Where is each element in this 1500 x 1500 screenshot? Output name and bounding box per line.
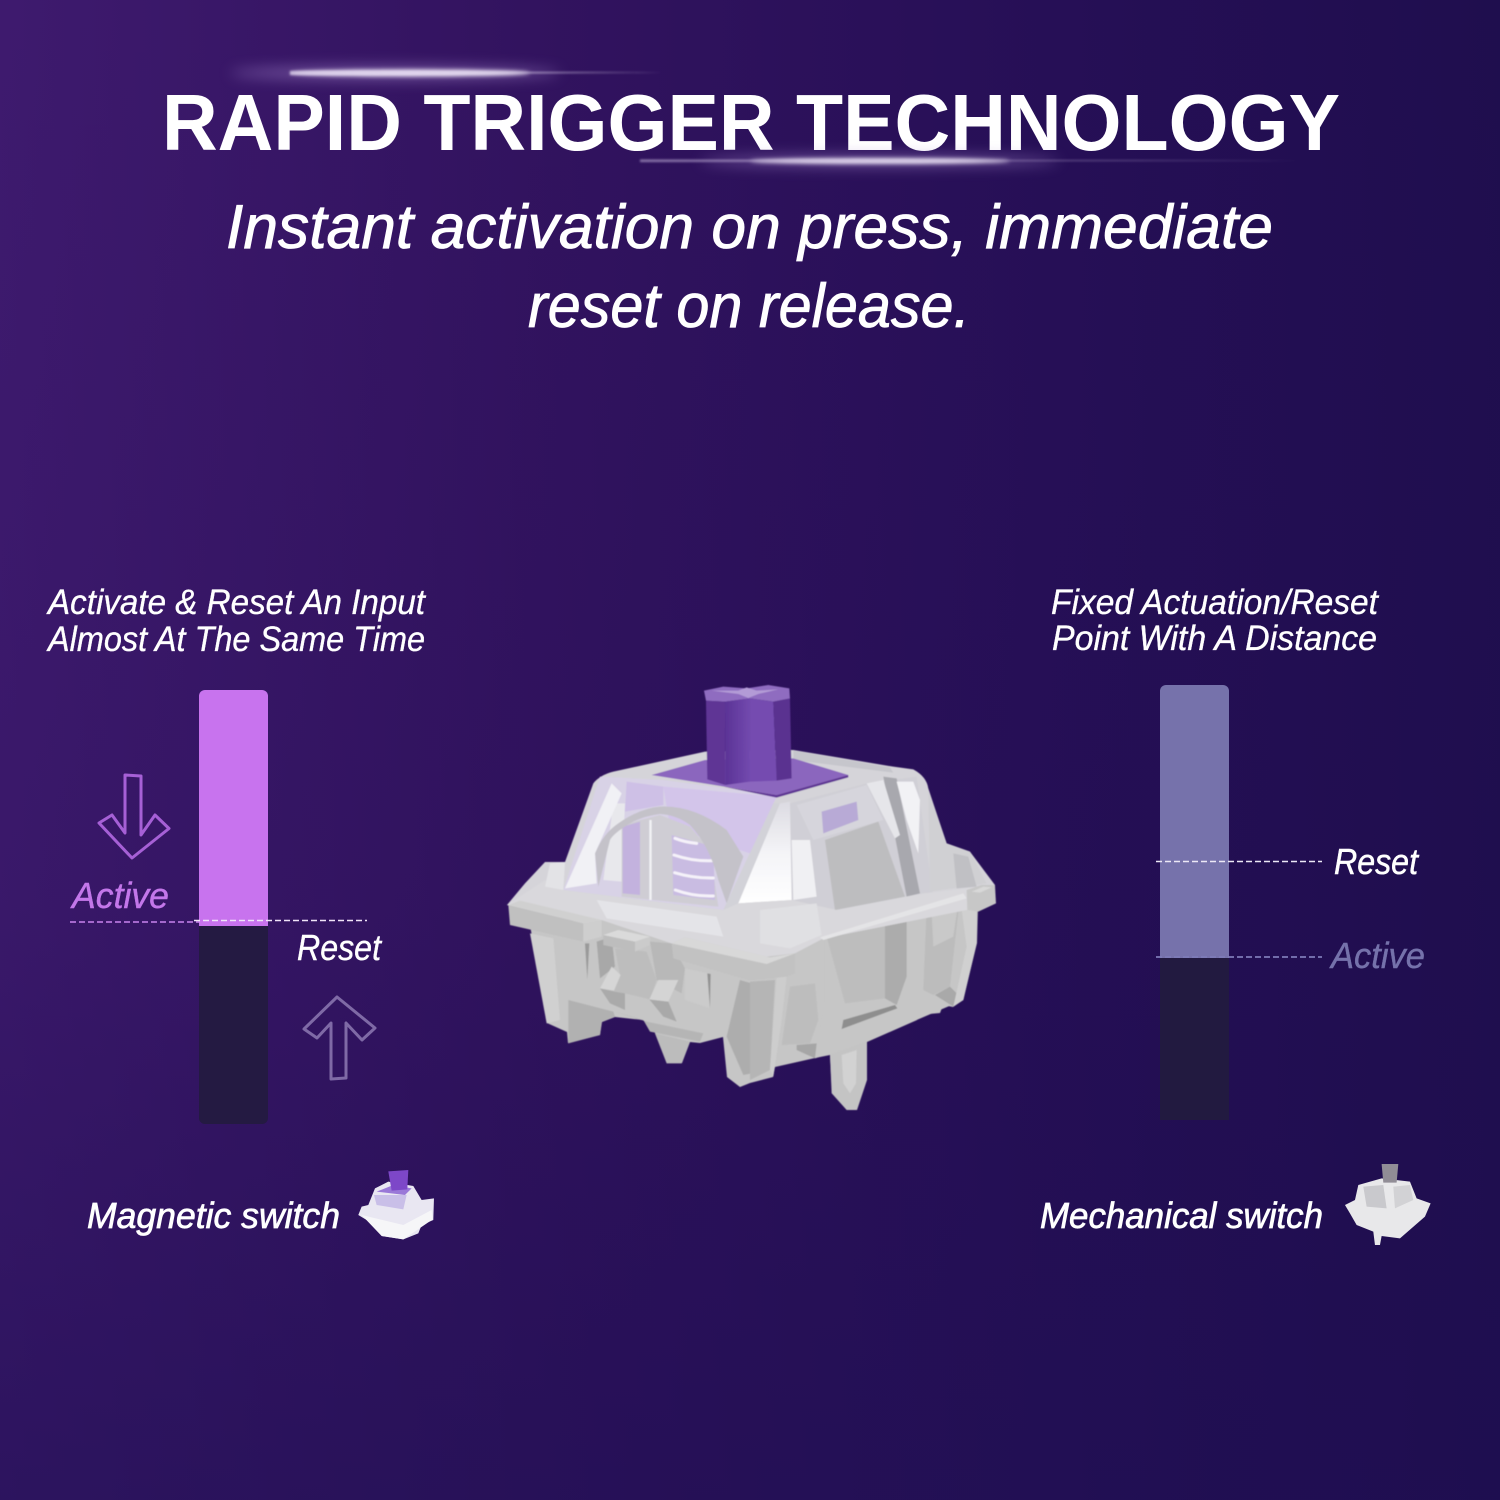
icon: small magnetic switch <box>358 1170 434 1239</box>
pins and lower housing <box>530 900 978 1110</box>
lower left facets <box>530 930 752 1075</box>
front window <box>563 777 777 910</box>
label: magnetic switch: Magnetic switch <box>87 1195 340 1236</box>
label: mechanical switch: Mechanical switch <box>1040 1195 1323 1236</box>
active line: magnetic <box>70 921 200 923</box>
heading: magnetic <box>46 583 426 659</box>
top edge detail <box>793 751 893 773</box>
purple plate <box>652 758 848 798</box>
heading: mechanical: Point With A Distance <box>1052 619 1377 658</box>
label: active: Active <box>1329 935 1425 976</box>
travel bar: mechanical <box>1160 685 1229 1120</box>
title: RAPID TRIGGER TECHNOLOGY <box>162 78 1340 167</box>
heading: mechanical <box>1051 583 1379 658</box>
reset line: mechanical <box>1156 860 1322 862</box>
heading: magnetic: Activate & Reset An Input <box>46 583 426 622</box>
interior below arch <box>622 815 718 907</box>
right nub <box>820 885 996 940</box>
label: reset: Reset <box>1334 841 1420 882</box>
icon: up arrow <box>304 997 375 1079</box>
icon: down arrow <box>99 775 169 858</box>
icon: small mechanical switch <box>1345 1164 1431 1245</box>
travel bar: magnetic <box>199 690 268 1124</box>
lower band <box>507 880 995 957</box>
subtitle <box>226 193 1273 341</box>
lower right facets <box>750 892 977 1110</box>
locating pin <box>830 1042 867 1110</box>
label: reset: Reset <box>297 927 383 968</box>
heading: mechanical: Fixed Actuation/Reset <box>1051 583 1379 622</box>
arch <box>595 807 743 903</box>
heading: magnetic: Almost At The Same Time <box>46 620 425 659</box>
upper transparent housing <box>507 750 995 957</box>
subtitle line 2: reset on release. <box>528 272 970 341</box>
right window <box>790 777 933 910</box>
panel: magnetic switch diagram <box>46 583 434 1239</box>
reset line: magnetic <box>194 920 367 922</box>
active line: mechanical <box>1156 956 1322 958</box>
purple stem <box>704 685 792 785</box>
clip top <box>603 935 635 952</box>
label: active: Active <box>70 875 169 916</box>
foot shadow <box>568 1000 615 1043</box>
light streak: bottom <box>640 155 1302 167</box>
subtitle line 1: Instant activation on press, immediate <box>226 193 1273 262</box>
ridge and white facet <box>723 803 780 910</box>
clip arm <box>600 948 657 999</box>
main switch illustration <box>507 685 996 1110</box>
light streak: top <box>230 66 663 80</box>
panel: mechanical switch diagram <box>1040 583 1431 1245</box>
lower right body <box>815 892 977 1058</box>
flanges <box>508 901 795 981</box>
spring <box>672 835 715 900</box>
